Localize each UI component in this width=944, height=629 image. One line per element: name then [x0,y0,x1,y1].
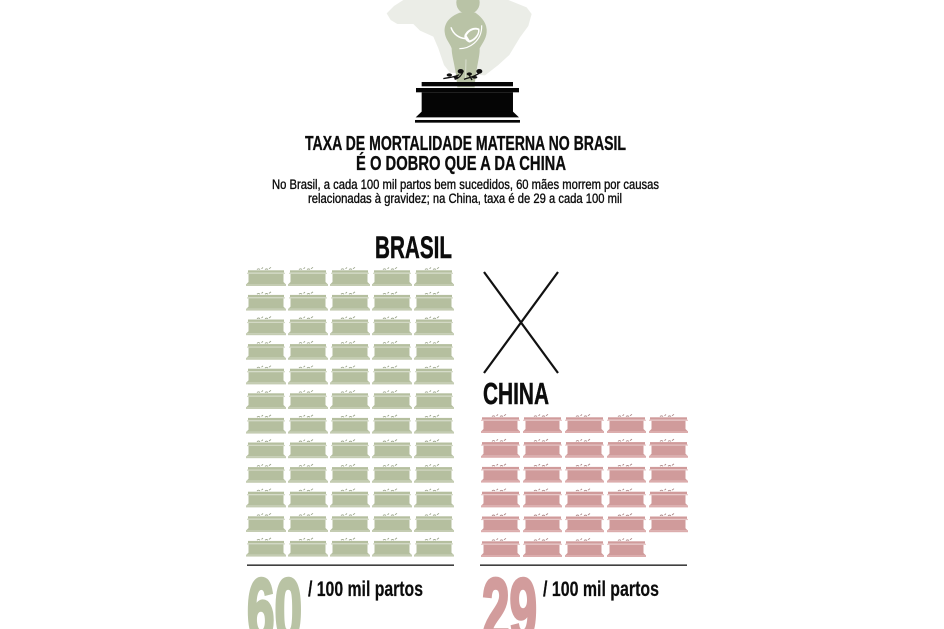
versus X symbol [484,272,558,373]
pictogram: 29 pink coffins [481,414,688,557]
title: É O DOBRO QUE A DA CHINA [356,152,566,175]
subtitle text: relacionadas à gravidez; na China, taxa é de 29 a cada 100 mil [308,191,622,206]
panel: Brasil [246,229,454,629]
panel: China [480,377,688,629]
subtitle text: No Brasil, a cada 100 mil partos bem sucedidos, 60 mães morrem por causas [272,177,659,192]
map of Brazil [387,0,532,75]
pictogram: 60 green coffins [246,267,454,557]
mother and baby figure [445,0,487,87]
pedestal [415,82,520,123]
subtitle text [272,177,659,206]
title: TAXA DE MORTALIDADE MATERNA NO BRASIL [305,132,626,155]
heading: China: CHINA [483,377,549,411]
flower blooms [447,69,482,79]
unit label: Brasil: / 100 mil partos [308,578,423,601]
unit label: China: / 100 mil partos [543,578,659,601]
title [305,132,626,175]
flowers [443,71,480,80]
illustration: mother statue on pedestal over map of Brazil [387,0,532,123]
heading: Brasil: BRASIL [375,229,452,265]
